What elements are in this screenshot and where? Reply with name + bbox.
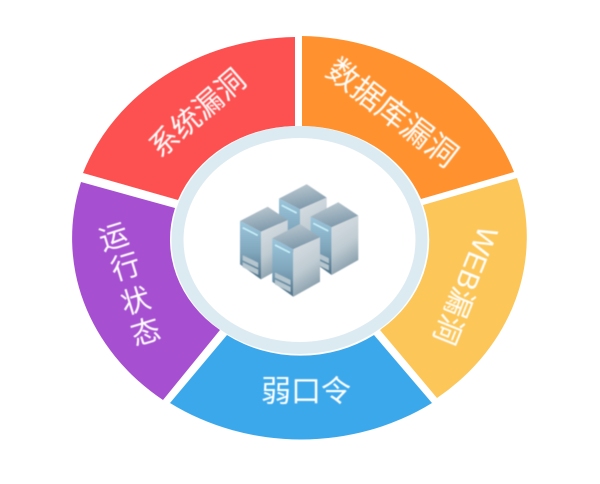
center ring (172, 126, 428, 354)
center disc (184, 138, 416, 342)
label: 运行状态: 状 (117, 282, 155, 322)
label: 数据库漏洞: 数据库漏洞 (320, 52, 464, 174)
server: back (279, 184, 327, 257)
label: 弱口令: 弱口令 (261, 376, 351, 408)
label: WEB漏洞: WEB漏洞 (427, 221, 503, 349)
label: 运行状态: 态 (127, 313, 165, 353)
label: 系统漏洞: 系统漏洞 (143, 63, 252, 164)
panel: 系统漏洞 segment (83, 37, 295, 200)
server: front (272, 224, 320, 297)
label: 运行状态: 行 (107, 248, 145, 288)
server: left (240, 207, 288, 279)
panel: 运行状态 segment (72, 182, 220, 400)
label: 运行状态 (95, 218, 165, 353)
server: right (311, 202, 358, 275)
panel: 弱口令 segment (170, 335, 432, 439)
icon: server cluster (240, 184, 358, 297)
panel: WEB漏洞 segment (380, 178, 527, 398)
label: 运行状态: 运 (95, 218, 133, 258)
panel: 数据库漏洞 segment (302, 36, 514, 199)
